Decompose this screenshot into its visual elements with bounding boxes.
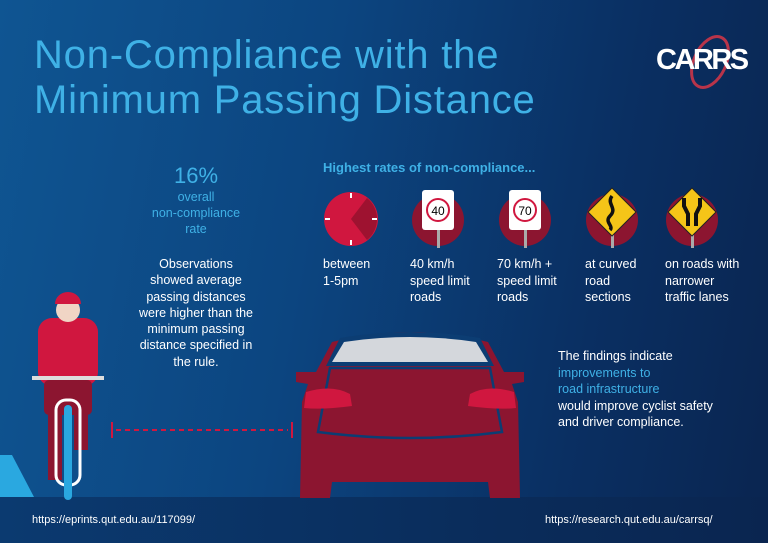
text: at curved — [585, 257, 636, 271]
heading: highest rates: Highest rates of non-compliance... — [323, 160, 535, 175]
text: findings: and driver compliance. — [558, 415, 684, 429]
captions: between — [323, 257, 370, 271]
stat: 16%: 16% — [174, 163, 218, 188]
decoration: light blue corner — [0, 455, 34, 497]
title: Minimum Passing Distance — [34, 78, 536, 122]
icon: 70 sign — [499, 190, 551, 248]
logo: CARRS — [656, 35, 748, 89]
bottom strip — [0, 497, 768, 543]
car — [296, 332, 524, 498]
text: narrower — [665, 274, 714, 288]
text: findings — [558, 349, 713, 429]
text: speed limit — [410, 274, 470, 288]
text: road — [585, 274, 610, 288]
text: observations: showed average — [150, 273, 242, 287]
text: observations: distance specified in — [140, 338, 252, 352]
text: 40 km/h — [410, 257, 454, 271]
icon: 40 sign — [412, 190, 464, 248]
text: observations: were higher than the — [139, 306, 253, 320]
text: traffic lanes — [665, 290, 729, 304]
icon: clock — [324, 192, 378, 246]
text: observations — [139, 257, 253, 369]
text: roads — [497, 290, 528, 304]
arrow: passing distance — [111, 422, 293, 438]
text: roads — [410, 290, 441, 304]
icon: 70 sign: 70 — [518, 204, 532, 218]
text: observations: Observations — [159, 257, 233, 271]
cyclist — [32, 292, 104, 500]
icon: curved road sign — [586, 187, 638, 248]
text: observations: passing distances — [146, 290, 246, 304]
text: sections — [585, 290, 631, 304]
title: Non-Compliance with the — [34, 33, 499, 77]
text: on roads with — [665, 257, 739, 271]
text: observations: minimum passing — [147, 322, 245, 336]
logo: CARRS: CARRS — [656, 44, 747, 76]
text: findings: improvements to — [558, 366, 650, 380]
text: findings: The findings indicate — [558, 349, 673, 363]
stat: 16% — [152, 163, 240, 236]
icon: 40 sign: 40 — [431, 204, 445, 218]
captions: 1-5pm — [323, 274, 358, 288]
stat: 16%: rate — [185, 222, 207, 236]
text: 70 km/h + — [497, 257, 552, 271]
stat: 16%: non-compliance — [152, 206, 240, 220]
text: findings: road infrastructure — [558, 382, 659, 396]
text: observations: the rule. — [173, 355, 219, 369]
title — [34, 33, 536, 122]
captions — [323, 257, 370, 288]
footer link right: https://research.qut.edu.au/carrsq/ — [545, 514, 713, 526]
text: findings: would improve cyclist safety — [558, 398, 713, 412]
footer link left: https://eprints.qut.edu.au/117099/ — [32, 514, 195, 526]
icon: narrow road sign — [666, 188, 718, 248]
text: speed limit — [497, 274, 557, 288]
stat: 16%: overall — [178, 190, 214, 204]
